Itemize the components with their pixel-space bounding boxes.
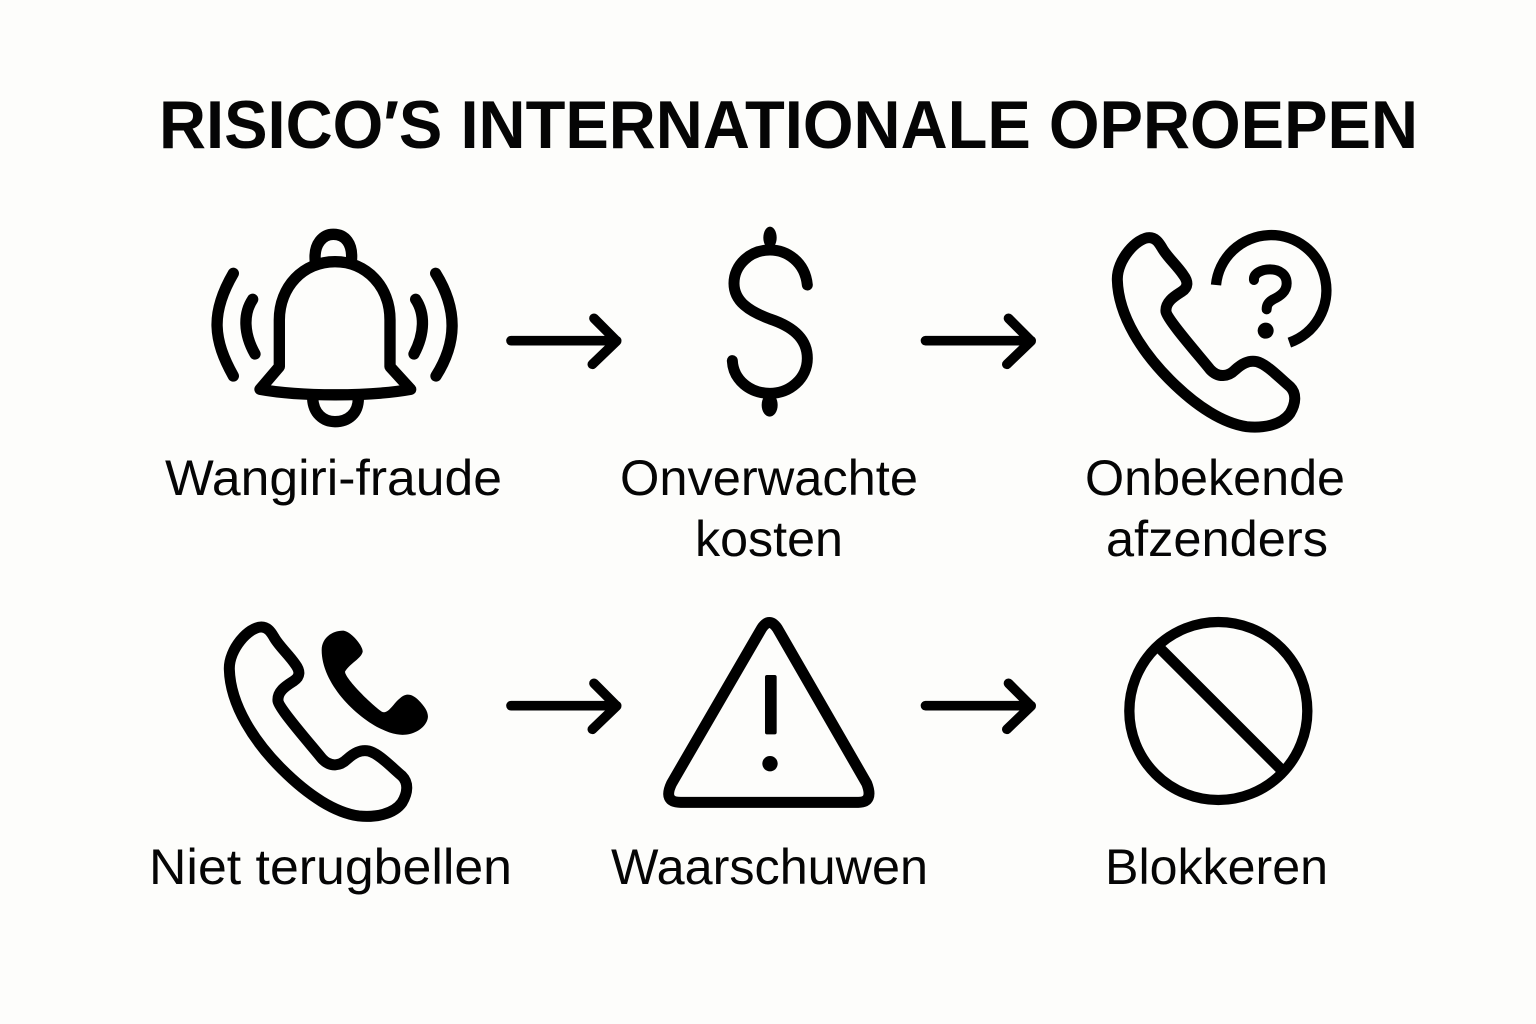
label: Wangiri-fraude: Wangiri-fraude (165, 450, 502, 506)
label: Waarschuwen: Waarschuwen (611, 839, 928, 895)
icon: phone with question mark (1117, 235, 1326, 427)
arrow: warning to block (925, 683, 1031, 729)
label: Blokkeren: Blokkeren (1105, 839, 1328, 895)
icon: block sign (1129, 622, 1307, 800)
label: Onverwachte kosten (620, 450, 918, 567)
icon: two phones (229, 627, 428, 816)
label: Onbekende afzenders: afzenders (1106, 511, 1328, 567)
label: Onverwachte kosten: kosten (695, 511, 843, 567)
icon: ringing bell (217, 234, 452, 422)
label: Onverwachte kosten: Onverwachte (620, 450, 918, 506)
label: Onbekende afzenders: Onbekende (1085, 450, 1345, 506)
icon: dollar sign (732, 227, 807, 417)
arrow: dollar to phone (925, 318, 1031, 364)
icon: warning triangle (669, 622, 869, 802)
arrow: bell to dollar (511, 318, 617, 364)
title: RISICO′S INTERNATIONALE OPROEPEN (159, 87, 1418, 163)
label: Onbekende afzenders (1085, 450, 1345, 567)
label: Niet terugbellen: Niet terugbellen (149, 839, 512, 895)
arrow: phones to warning (511, 683, 617, 729)
